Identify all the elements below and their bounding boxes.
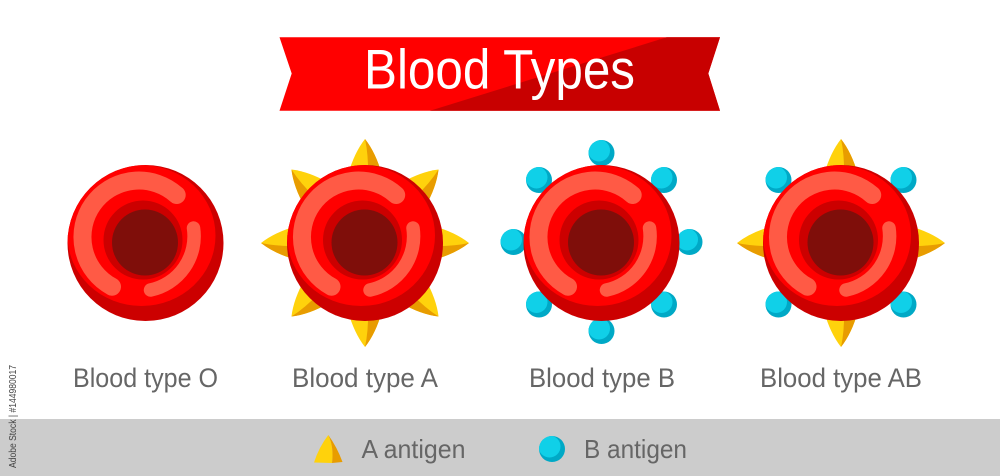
legend bar <box>0 419 1000 476</box>
legend background <box>0 419 1000 476</box>
blood cell type AB <box>737 139 945 347</box>
label: type A: Blood type A <box>292 363 438 393</box>
cell body <box>524 165 680 321</box>
blood cell type B <box>500 140 702 344</box>
legend text: A antigen: A antigen <box>362 434 466 464</box>
title: Blood Types <box>364 38 635 100</box>
icon: B antigen <box>538 436 565 462</box>
label: type B: Blood type B <box>529 363 675 393</box>
blood cell type A <box>261 139 469 347</box>
cell body <box>287 165 443 321</box>
label: type O: Blood type O <box>73 363 218 393</box>
A antigen spikes <box>261 139 469 347</box>
B antigen balls <box>500 140 702 344</box>
blood cell type O <box>68 165 224 321</box>
ribbon shade <box>430 37 720 111</box>
cell body <box>763 165 919 321</box>
legend text: B antigen: B antigen <box>584 434 687 464</box>
label: type AB: Blood type AB <box>760 363 922 393</box>
title banner <box>280 37 720 111</box>
stock id caption: Adobe Stock | #144980017 <box>7 365 19 468</box>
antigens <box>737 139 945 347</box>
cell body <box>68 165 224 321</box>
ribbon <box>280 37 720 111</box>
icon: A antigen <box>314 435 342 463</box>
